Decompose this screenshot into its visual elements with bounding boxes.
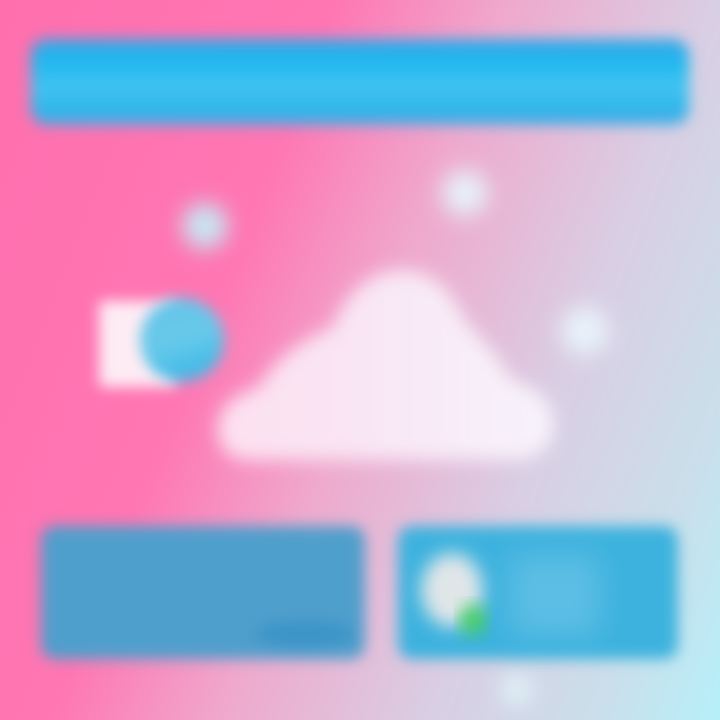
decorative dot: bottom [501, 674, 533, 706]
icon: green accent [461, 605, 485, 635]
icon: blue circle [140, 298, 224, 382]
panel: bottom right [398, 526, 678, 659]
decorative dot: upper left [182, 203, 228, 249]
icon: white card with blue circle [99, 298, 224, 387]
panel button patch [255, 620, 355, 648]
icon: white card [99, 301, 177, 387]
icon: white blob [421, 553, 483, 627]
title banner [31, 39, 689, 125]
panel background [398, 526, 678, 659]
panel highlight [510, 555, 600, 635]
panel: bottom left [41, 526, 365, 659]
decorative dot: right [561, 307, 609, 355]
decorative dot: upper right [442, 170, 488, 216]
illustration: cloud [218, 270, 554, 460]
